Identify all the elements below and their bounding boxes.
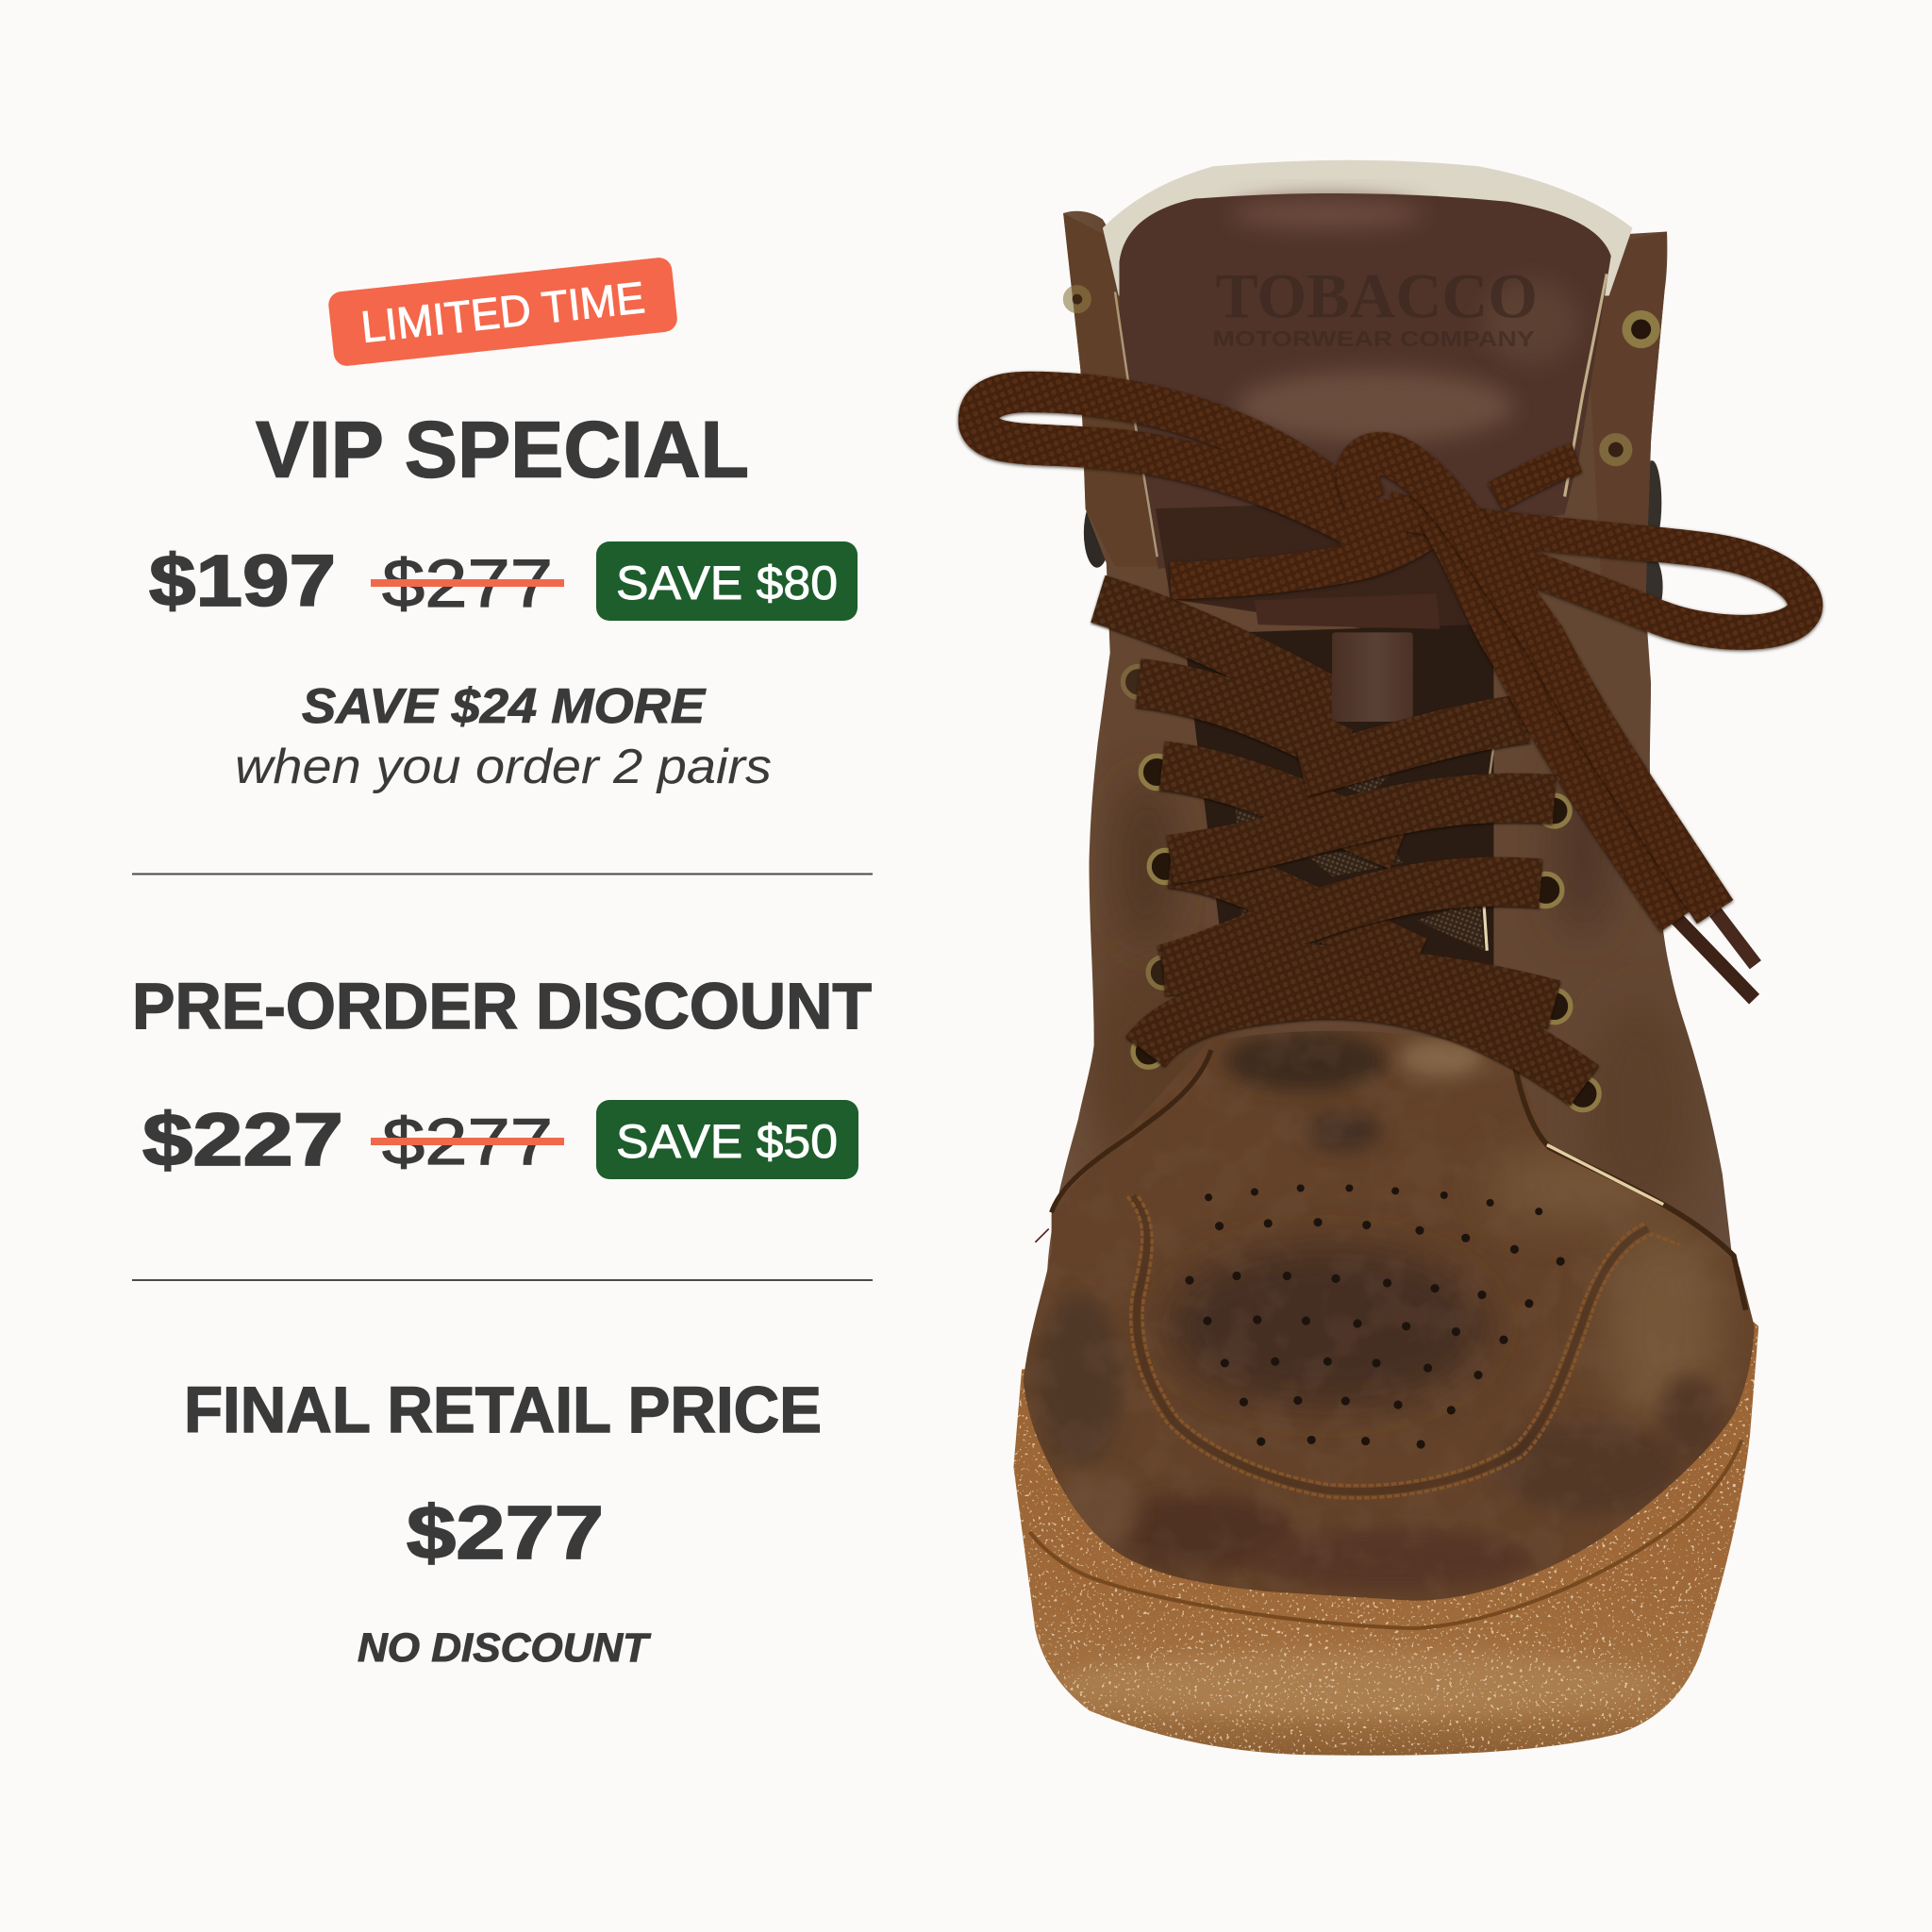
price row: VIP: $197: [149, 541, 336, 622]
price row: pre-order: [142, 1097, 858, 1181]
price row: VIP: $277: [382, 547, 553, 622]
tongue with embossed logo: [1115, 193, 1611, 647]
price row: pre-order: $277: [382, 1105, 553, 1178]
boot photo illustration: [978, 160, 1806, 1765]
heel bumps behind the upper: [1084, 460, 1663, 617]
badge: limited time: [327, 257, 678, 367]
price: final: $277: [407, 1491, 604, 1574]
price row: pre-order: SAVE $50: [616, 1115, 838, 1168]
lining: [1103, 160, 1632, 295]
tongue with embossed logo: MOTORWEAR COMPANY: [1212, 326, 1535, 351]
toe perforations: [1185, 1184, 1565, 1449]
text: save more: [235, 679, 772, 794]
heading: pre-order discount: PRE-ORDER DISCOUNT: [132, 970, 872, 1042]
bow: loops, knot and hanging lace ends: [978, 290, 1806, 999]
text: save more: SAVE $24 MORE: [302, 679, 706, 734]
heading: final retail price: FINAL RETAIL PRICE: [184, 1374, 822, 1446]
heading: VIP special: VIP SPECIAL: [256, 406, 749, 494]
price row: VIP: SAVE $80: [616, 557, 838, 609]
tongue with embossed logo: TOBACCO: [1216, 260, 1538, 331]
lacing area with mesh, tab, eyelets and crossing laces: [1098, 593, 1599, 1110]
price row: pre-order: $227: [142, 1097, 343, 1181]
text: no discount: NO DISCOUNT: [358, 1625, 652, 1671]
badge: limited time: LIMITED TIME: [358, 272, 647, 352]
price row: VIP: [149, 541, 858, 622]
sole: [1003, 1305, 1772, 1765]
toe cap: [1023, 1030, 1755, 1601]
upper leather body: [1047, 211, 1732, 1271]
text: save more: when you order 2 pairs: [235, 740, 772, 794]
